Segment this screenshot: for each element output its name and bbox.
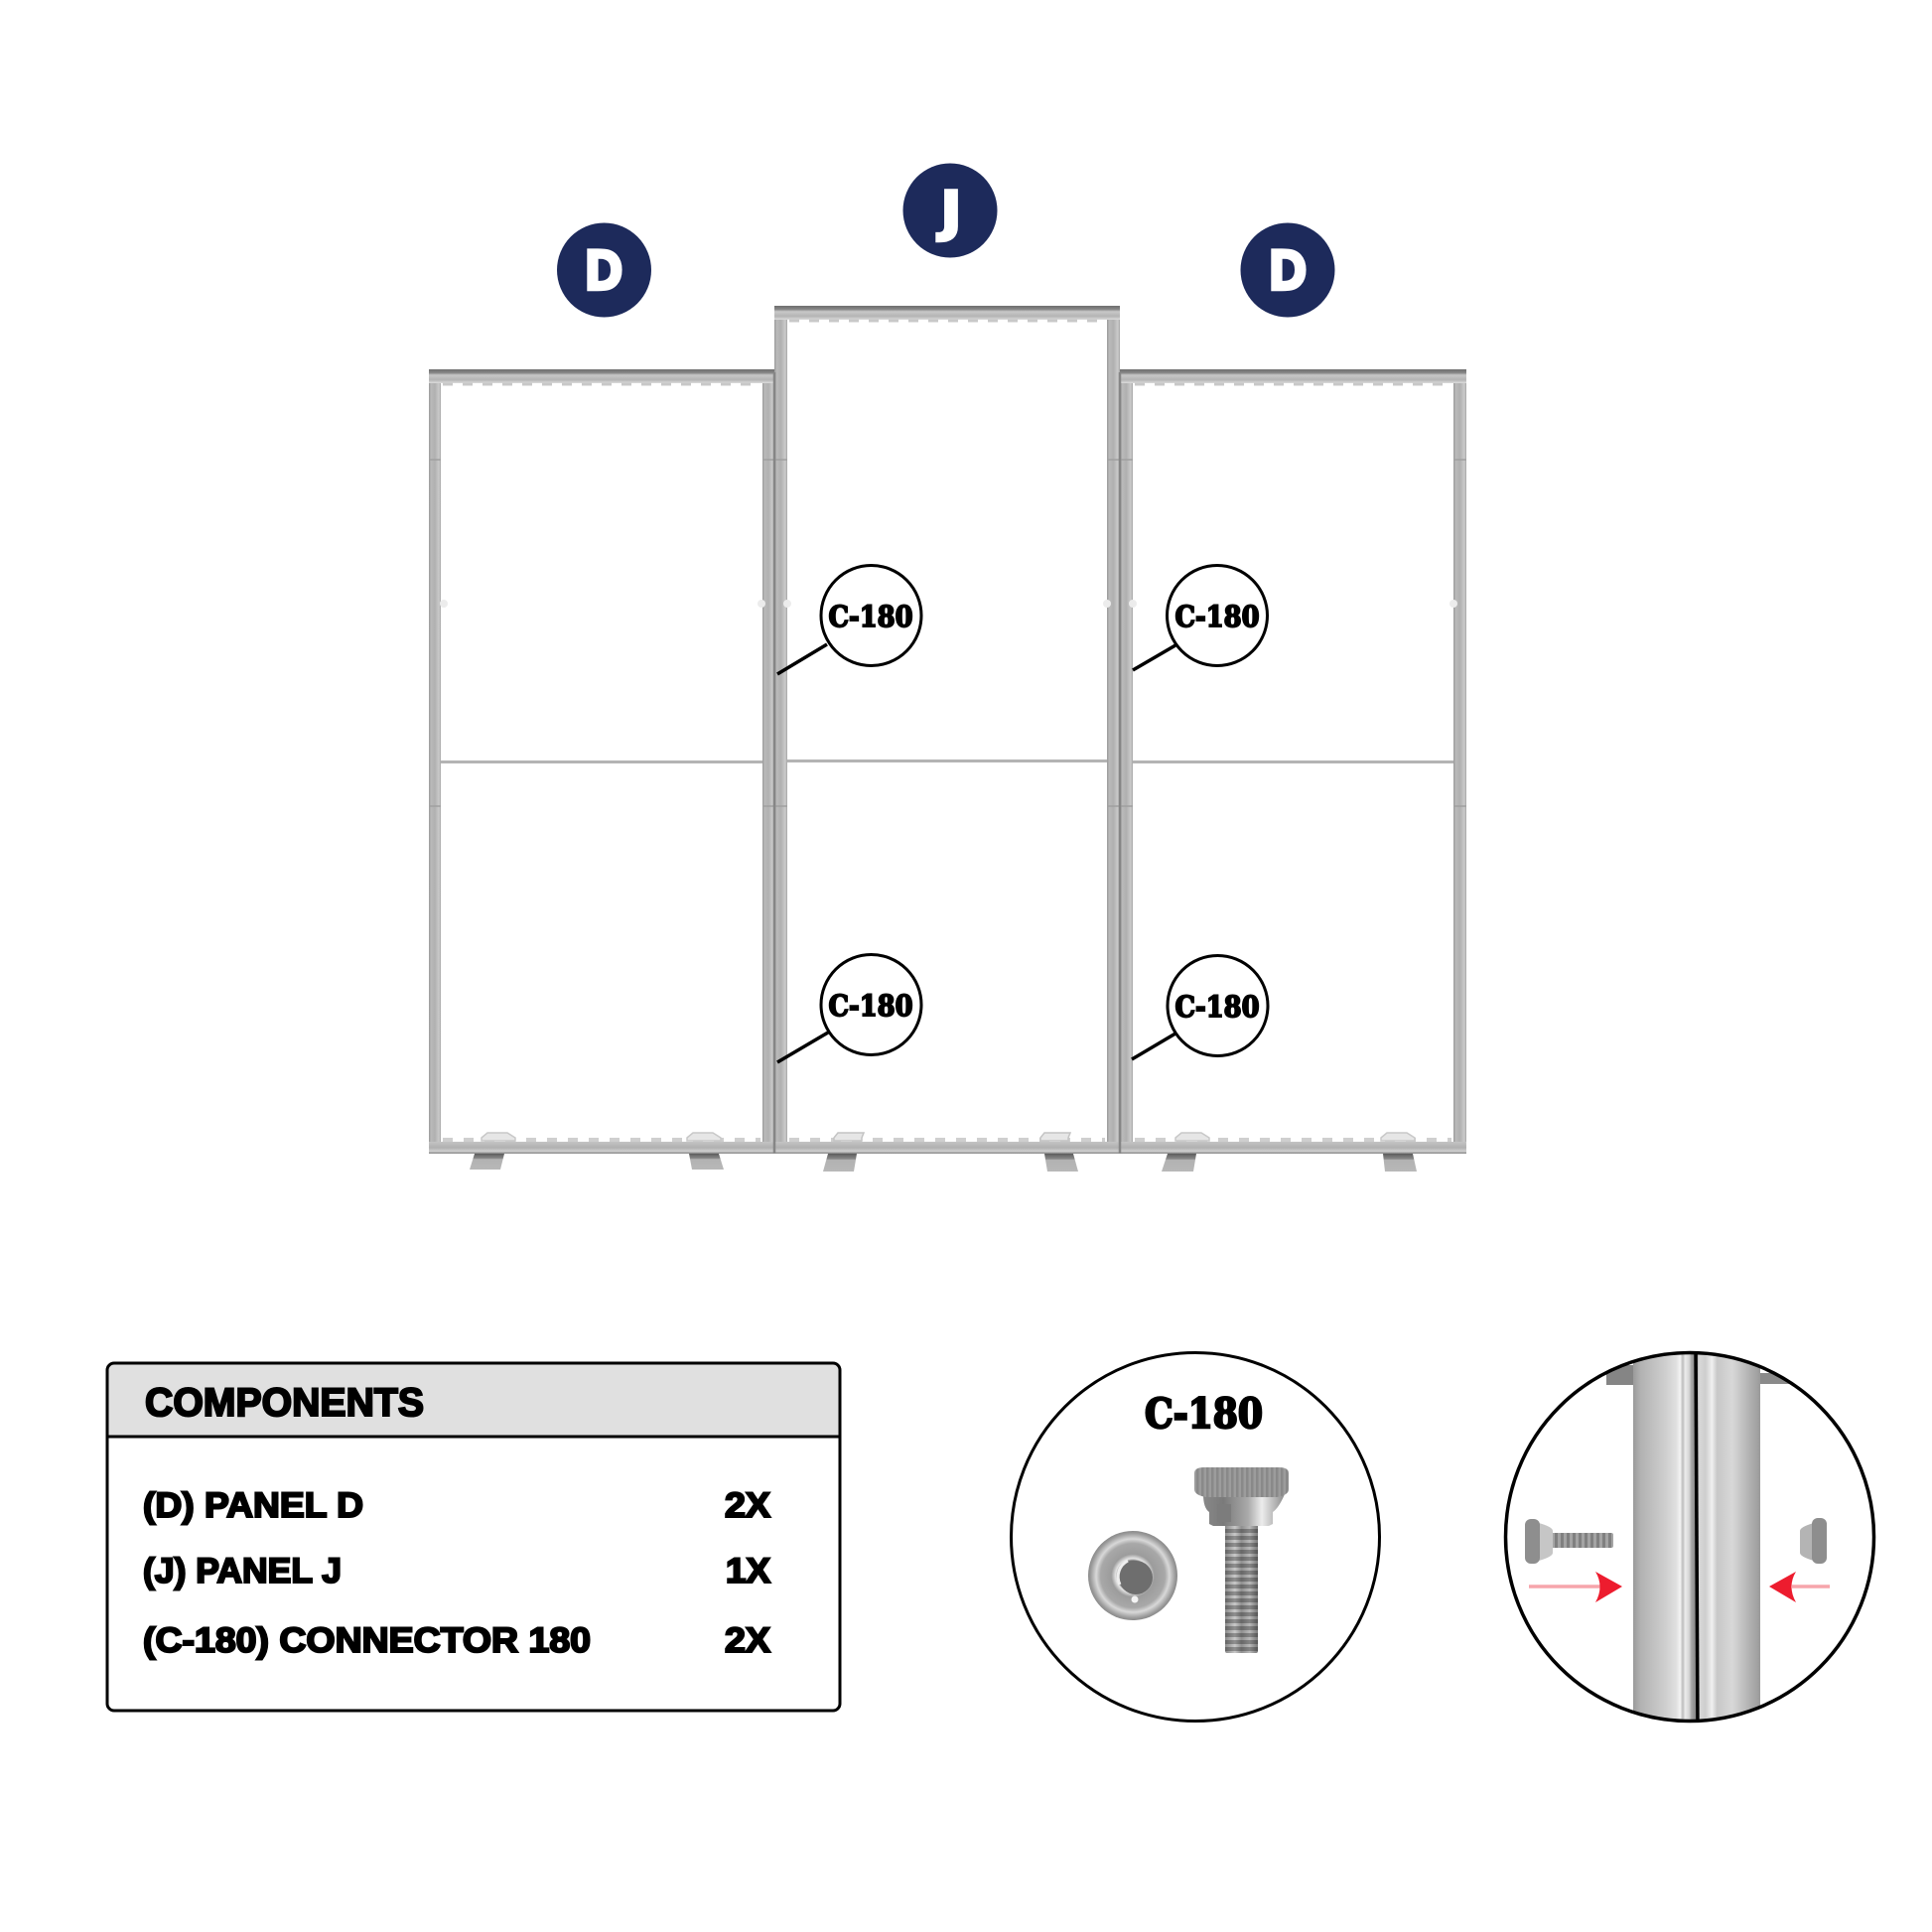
badge: D right bbox=[1241, 222, 1334, 318]
badge: D left: D bbox=[584, 239, 623, 303]
badge: D left bbox=[557, 222, 651, 318]
row: connector 180: (C-180) CONNECTOR 180 bbox=[143, 1621, 591, 1660]
callout: C-180 lower center: C-180 bbox=[828, 989, 913, 1023]
panel J center frame bbox=[774, 306, 1120, 1154]
row: panel J: (J) PANEL J bbox=[143, 1552, 342, 1590]
row: panel D: (D) PANEL D bbox=[143, 1486, 363, 1525]
badge: J center: J bbox=[936, 180, 962, 243]
tube with brackets bbox=[1606, 1345, 1791, 1732]
table heading: COMPONENTS bbox=[145, 1381, 424, 1425]
icon: nut bbox=[1088, 1531, 1177, 1620]
callout: C-180 upper right bbox=[1133, 566, 1267, 670]
detail heading: C-180 bbox=[1145, 1390, 1263, 1438]
callout: C-180 lower right bbox=[1132, 955, 1268, 1059]
panel D right frame bbox=[1120, 369, 1466, 1154]
row: panel D bbox=[143, 1486, 771, 1525]
assembly diagram bbox=[429, 306, 1466, 1172]
badge: J center bbox=[903, 163, 997, 258]
row: panel J bbox=[143, 1552, 771, 1590]
row: connector 180 bbox=[143, 1621, 771, 1660]
detail circle: connector installation bbox=[1505, 1345, 1874, 1732]
panel D left frame bbox=[429, 369, 774, 1154]
badge: D right: D bbox=[1268, 239, 1308, 303]
callout: C-180 upper center: C-180 bbox=[828, 600, 913, 633]
arrow: right red bbox=[1769, 1572, 1830, 1602]
arrow: left red bbox=[1529, 1572, 1622, 1602]
callout: C-180 lower right: C-180 bbox=[1175, 990, 1259, 1024]
callout: C-180 upper center bbox=[777, 566, 921, 674]
icon: right nut bbox=[1800, 1518, 1827, 1564]
icon: left screw bbox=[1525, 1519, 1613, 1564]
row: connector 180: 2X bbox=[725, 1621, 771, 1660]
feet bbox=[470, 1154, 1417, 1172]
icon: thumb screw bbox=[1194, 1467, 1289, 1653]
detail circle: C-180 connector parts bbox=[1011, 1352, 1380, 1722]
row: panel J: 1X bbox=[726, 1552, 771, 1590]
callout: C-180 lower center bbox=[777, 955, 921, 1062]
panel: components table bbox=[107, 1363, 840, 1711]
row: panel D: 2X bbox=[725, 1486, 771, 1525]
callout: C-180 upper right: C-180 bbox=[1175, 600, 1259, 633]
